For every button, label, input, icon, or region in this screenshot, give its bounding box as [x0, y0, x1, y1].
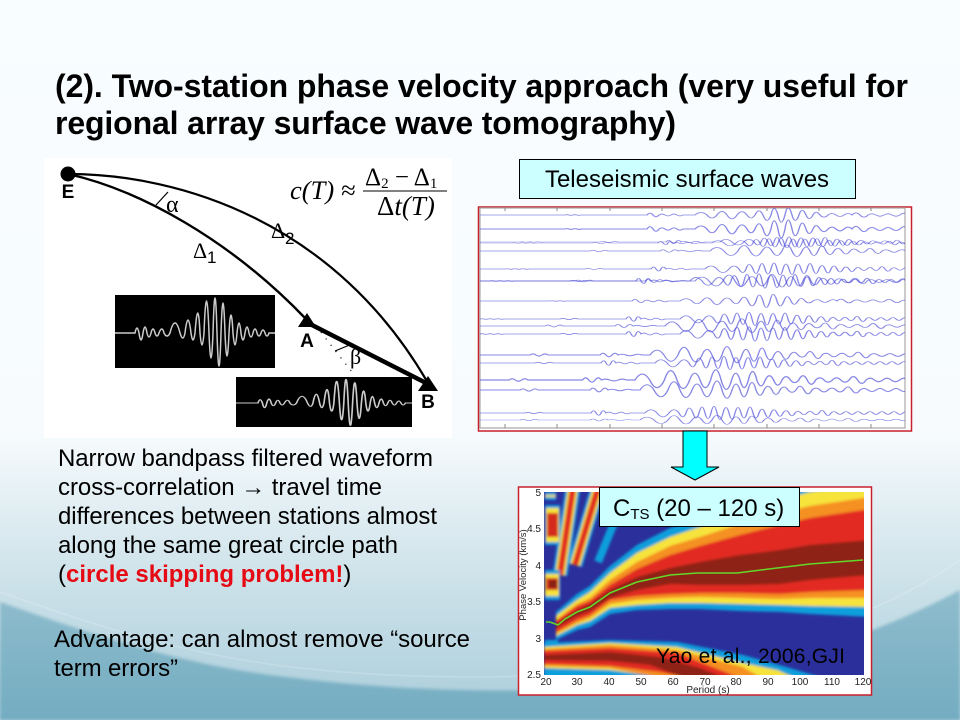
- x axis labels: Period (s): [686, 685, 730, 696]
- left column blobs and diagonal stripes: [560, 488, 616, 575]
- panel: two-station ray diagram: [44, 158, 452, 438]
- y axis labels: 4.5: [527, 524, 541, 535]
- x axis labels: 110: [824, 677, 840, 688]
- waveform at station B: [236, 377, 412, 427]
- text block: method description: [58, 445, 437, 588]
- y axis labels: [518, 488, 541, 681]
- formula: Δt(T): [377, 191, 435, 221]
- station B: B: [421, 392, 435, 413]
- text block: method description: Narrow bandpass filtered waveform: [58, 445, 433, 472]
- station B: [418, 376, 438, 413]
- x axis labels: 50: [635, 677, 647, 688]
- x axis labels: 90: [762, 677, 774, 688]
- formula: 1: [430, 176, 437, 192]
- angle and distance labels: α: [166, 192, 179, 218]
- citation: Yao et al., 2006,GJI: [656, 645, 845, 668]
- y axis labels: 5: [535, 488, 541, 499]
- station A: [298, 313, 316, 352]
- angle and distance labels: 1: [207, 248, 216, 267]
- text block: advantage: term errors”: [54, 655, 178, 682]
- angle and distance labels: β: [350, 344, 361, 369]
- label: C_TS range: TS: [630, 506, 650, 523]
- text block: method description: differences between stations almost: [58, 503, 437, 530]
- icon: epicentre E: [60, 166, 76, 203]
- label: Teleseismic surface waves: [520, 160, 856, 198]
- label: C_TS range: [600, 488, 800, 526]
- angle and distance labels: [166, 192, 361, 369]
- angle and distance labels: Δ: [193, 238, 207, 263]
- ray paths: [68, 174, 428, 384]
- formula: − Δ: [389, 164, 430, 191]
- x axis labels: 20: [540, 677, 552, 688]
- title: regional array surface wave tomography): [55, 105, 676, 141]
- waveform at station A: [115, 295, 275, 368]
- x axis labels: 70: [699, 677, 711, 688]
- label: C_TS range: (20 – 120 s): [650, 495, 784, 522]
- label: C_TS range: C: [613, 495, 630, 522]
- x axis labels: 120: [855, 677, 872, 688]
- formula: 2: [381, 176, 389, 192]
- x axis labels: [540, 677, 872, 696]
- y axis labels: Phase Velocity (km/s): [518, 529, 529, 621]
- text block: advantage: Advantage: can almost remove “source: [54, 626, 470, 653]
- chart: seismogram traces: [478, 206, 912, 432]
- chart: phase velocity dispersion image: [518, 470, 872, 696]
- y axis labels: 3.5: [527, 597, 541, 608]
- station A: A: [300, 331, 314, 352]
- lower band: [544, 638, 819, 675]
- x axis labels: 80: [730, 677, 742, 688]
- text block: advantage: [54, 626, 470, 682]
- heat map: [544, 492, 864, 675]
- y axis labels: 4: [535, 561, 541, 572]
- text block: method description: cross-correlation → travel time: [58, 474, 382, 501]
- formula: c(T) ≈: [290, 175, 355, 205]
- formula: Δ: [365, 164, 381, 191]
- text block: method description: (circle skipping problem!): [58, 561, 351, 588]
- x axis labels: 40: [603, 677, 615, 688]
- main dispersion band: [554, 492, 864, 641]
- x axis labels: 60: [667, 677, 679, 688]
- arrow: down to dispersion plot: [671, 431, 719, 480]
- icon: epicentre E: E: [62, 182, 74, 203]
- title: (2). Two-station phase velocity approach (very useful for: [55, 68, 908, 104]
- angle and distance labels: 2: [285, 229, 294, 248]
- label: Teleseismic surface waves: Teleseismic surface waves: [545, 166, 829, 193]
- y axis labels: 3: [535, 634, 541, 645]
- x axis labels: 100: [792, 677, 809, 688]
- title: [55, 68, 908, 141]
- formula: [290, 164, 447, 221]
- text block: method description: along the same great circle path: [58, 532, 398, 559]
- x axis labels: 30: [571, 677, 583, 688]
- angle and distance labels: Δ: [271, 218, 285, 243]
- green phase velocity curve: [546, 560, 863, 625]
- y axis labels: 2.5: [527, 670, 541, 681]
